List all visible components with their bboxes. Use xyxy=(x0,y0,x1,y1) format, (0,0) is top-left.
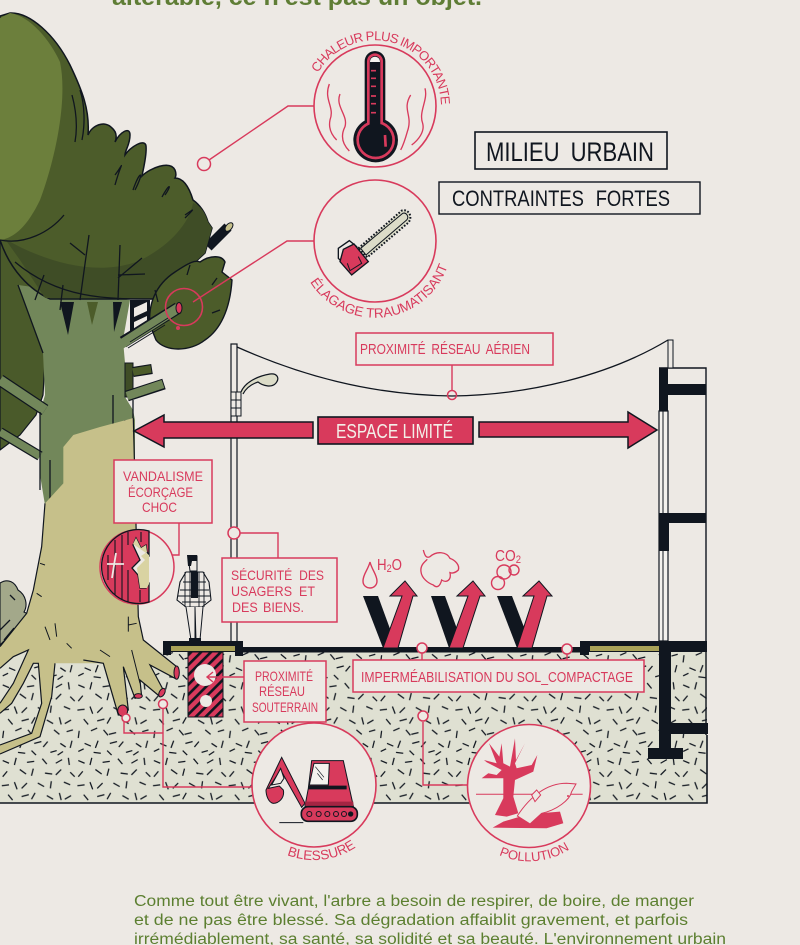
building frame xyxy=(580,368,708,759)
label: blessure: BLESSURE xyxy=(288,840,356,860)
callout: pollution leader xyxy=(418,711,468,785)
body text xyxy=(134,893,726,945)
callout: thermal leader xyxy=(198,106,314,170)
body text: et de ne pas être blessé. Sa dégradation affaiblit gravement, et parfois xyxy=(134,912,688,929)
label: sécurité des usagers xyxy=(222,527,337,622)
underground conduit xyxy=(188,652,223,717)
label: imperméabilisation du sol xyxy=(353,643,644,692)
icon: excavator circle xyxy=(252,723,376,847)
subtitle: contraintes fortes: CONTRAINTES FORTES xyxy=(452,186,670,211)
icon: CO2 bubbles: 2 xyxy=(516,554,521,566)
icon: water drop H2O: O xyxy=(392,557,402,574)
label: proximité réseau souterrain: SOUTERRAIN xyxy=(252,699,318,715)
callout: wound leaders xyxy=(122,700,252,787)
icon: heat thermometer circle xyxy=(314,45,436,167)
icon: bark damage circle xyxy=(100,530,174,604)
main foliage xyxy=(0,13,212,310)
icon: water drop H2O: H xyxy=(377,557,389,574)
label: vandalisme xyxy=(114,460,212,555)
tree trunk xyxy=(0,285,164,520)
soil ground xyxy=(0,652,707,803)
body text: Comme tout être vivant, l'arbre a besoin de respirer, de boire, de manger xyxy=(134,893,694,910)
label: proximité réseau souterrain xyxy=(207,661,326,722)
back foliage left xyxy=(0,240,45,450)
label: espace limité xyxy=(318,417,473,444)
label: vandalisme: VANDALISME xyxy=(123,468,203,484)
figure: man standing xyxy=(177,555,211,642)
icon: CO2 bubbles xyxy=(492,548,521,590)
icon: water drop H2O: 2 xyxy=(387,563,392,575)
trunk base and roots xyxy=(0,418,179,754)
label: sécurité des usagers: SÉCURITÉ DES xyxy=(231,567,324,583)
arrow: espace limité right xyxy=(479,412,657,448)
arrow: espace limité left xyxy=(134,415,313,447)
label: proximité réseau souterrain: RÉSEAU xyxy=(259,683,305,699)
title: milieu urbain xyxy=(475,132,667,169)
label: vandalisme: CHOC xyxy=(142,499,177,515)
icon: leaf xyxy=(421,550,459,587)
street lamp and overhead wire xyxy=(231,340,673,642)
impermeable arrows xyxy=(363,581,552,648)
ground slab left xyxy=(163,641,583,656)
label: sécurité des usagers: USAGERS ET xyxy=(231,583,315,599)
label: proximité réseau souterrain: PROXIMITÉ xyxy=(255,668,313,684)
pruned branch foliage xyxy=(120,257,232,349)
icon: pollution circle xyxy=(468,724,590,848)
label: proximité réseau aérien xyxy=(356,333,553,400)
label: elagage traumatisant: ÉLAGAGE TRAUMATISANT xyxy=(310,263,446,318)
label: pollution: POLLUTION xyxy=(500,842,569,862)
background shrub xyxy=(0,581,30,645)
black cut branch xyxy=(130,221,235,332)
label: vandalisme: ÉCORÇAGE xyxy=(128,484,193,500)
label: proximité réseau aérien: PROXIMITÉ RÉSEAU AÉRIEN xyxy=(360,341,530,358)
icon: CO2 bubbles: CO xyxy=(495,548,519,565)
callout: pruning leader xyxy=(166,241,314,326)
label: chaleur plus importante: CHALEUR PLUS IMPORTANTE xyxy=(312,31,450,104)
icon: water drop H2O xyxy=(363,557,402,588)
label: espace limité: ESPACE LIMITÉ xyxy=(336,420,453,443)
label: sécurité des usagers: DES BIENS. xyxy=(232,599,304,615)
title: milieu urbain: MILIEU URBAIN xyxy=(486,137,654,167)
icon: chainsaw circle xyxy=(314,180,436,302)
label: imperméabilisation du sol: IMPERMÉABILISATION DU SOL_COMPACTAGE xyxy=(361,669,633,686)
